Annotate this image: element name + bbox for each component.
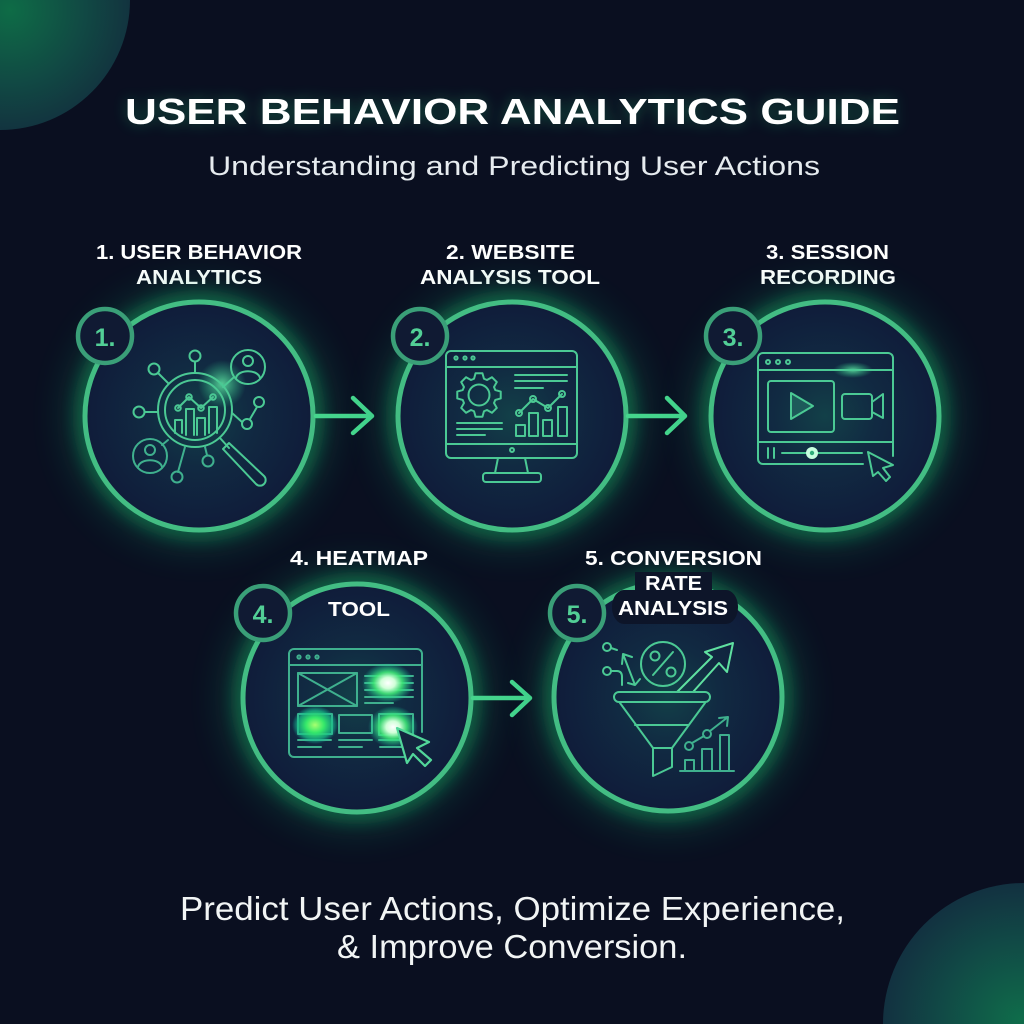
- step 5 label: 5. CONVERSION: [585, 548, 762, 570]
- step 4 ring: [239, 580, 475, 816]
- step 3 label: RECORDING: [760, 267, 896, 289]
- step 1 ring: [81, 298, 317, 534]
- decorative corner circle top left: [0, 0, 130, 130]
- title: USER BEHAVIOR ANALYTICS GUIDE: [125, 91, 900, 132]
- panel: step 1 user behavior analytics: [78, 242, 317, 534]
- step 5 label: RATE: [645, 573, 702, 595]
- step 4 label: TOOL: [328, 599, 390, 621]
- heat spot lower left: [292, 706, 338, 744]
- panel: step 5 conversion rate analysis: [550, 548, 786, 815]
- step 3 ring: [707, 298, 943, 534]
- subtitle: Understanding and Predicting User Actions: [208, 151, 820, 181]
- step 4 number badge: 4.: [253, 601, 273, 629]
- step 2 number badge: 2.: [410, 324, 430, 352]
- arrow: step 1 to step 2: [316, 398, 372, 433]
- heat spot lower right: [368, 706, 418, 748]
- icon: webpage heatmap with cursor: [289, 649, 431, 766]
- panel: step 4 heatmap tool: [236, 548, 475, 816]
- icon: conversion funnel with percent and growth: [603, 642, 733, 776]
- step 2 number badge: [393, 309, 447, 363]
- icon: video player with cursor: [758, 353, 893, 481]
- panel: step 2 website analysis tool: [393, 242, 630, 534]
- step 4 number badge: [236, 586, 290, 640]
- arrow: step 4 to step 5: [473, 682, 530, 715]
- step 5 label: ANALYSIS: [618, 598, 728, 620]
- step 1 label: [96, 242, 303, 289]
- step 1 number badge: 1.: [95, 324, 115, 352]
- title: USER BEHAVIOR ANALYTICS GUIDE: [125, 91, 900, 132]
- step 2 ring: [394, 298, 630, 534]
- step 3 label: 3. SESSION: [766, 242, 889, 264]
- step 5 number badge: [550, 586, 604, 640]
- panel: step 3 session recording: [706, 242, 943, 534]
- step 3 number badge: [706, 309, 760, 363]
- closing statement: [180, 890, 845, 965]
- decorative corner circle bottom right: [883, 883, 1024, 1024]
- icon: small growth bar chart: [680, 717, 734, 771]
- icon: monitor with gear and charts: [446, 351, 577, 482]
- icon: magnifier with network and chart: [133, 350, 266, 486]
- cursor: [397, 728, 431, 766]
- step 1 number badge: [78, 309, 132, 363]
- step 1 label: ANALYTICS: [136, 267, 262, 289]
- step 4 label: 4. HEATMAP: [290, 548, 428, 570]
- step 2 label: 2. WEBSITE: [446, 242, 575, 264]
- step 5 label: [585, 548, 762, 620]
- step 2 label: [420, 242, 600, 289]
- step 5 number badge: 5.: [567, 601, 587, 629]
- closing statement: Predict User Actions, Optimize Experience,: [180, 890, 845, 927]
- step 1 label: 1. USER BEHAVIOR: [96, 242, 303, 264]
- step 4 label: [290, 548, 428, 621]
- step 3 number badge: 3.: [723, 324, 743, 352]
- heat spot top right: [362, 663, 414, 703]
- closing statement: & Improve Conversion.: [337, 928, 687, 965]
- step 5 ring: [550, 579, 786, 815]
- step 2 label: ANALYSIS TOOL: [420, 267, 600, 289]
- step 5 label backing: [612, 572, 738, 624]
- step 3 label: [760, 242, 896, 289]
- arrow: step 2 to step 3: [628, 398, 685, 433]
